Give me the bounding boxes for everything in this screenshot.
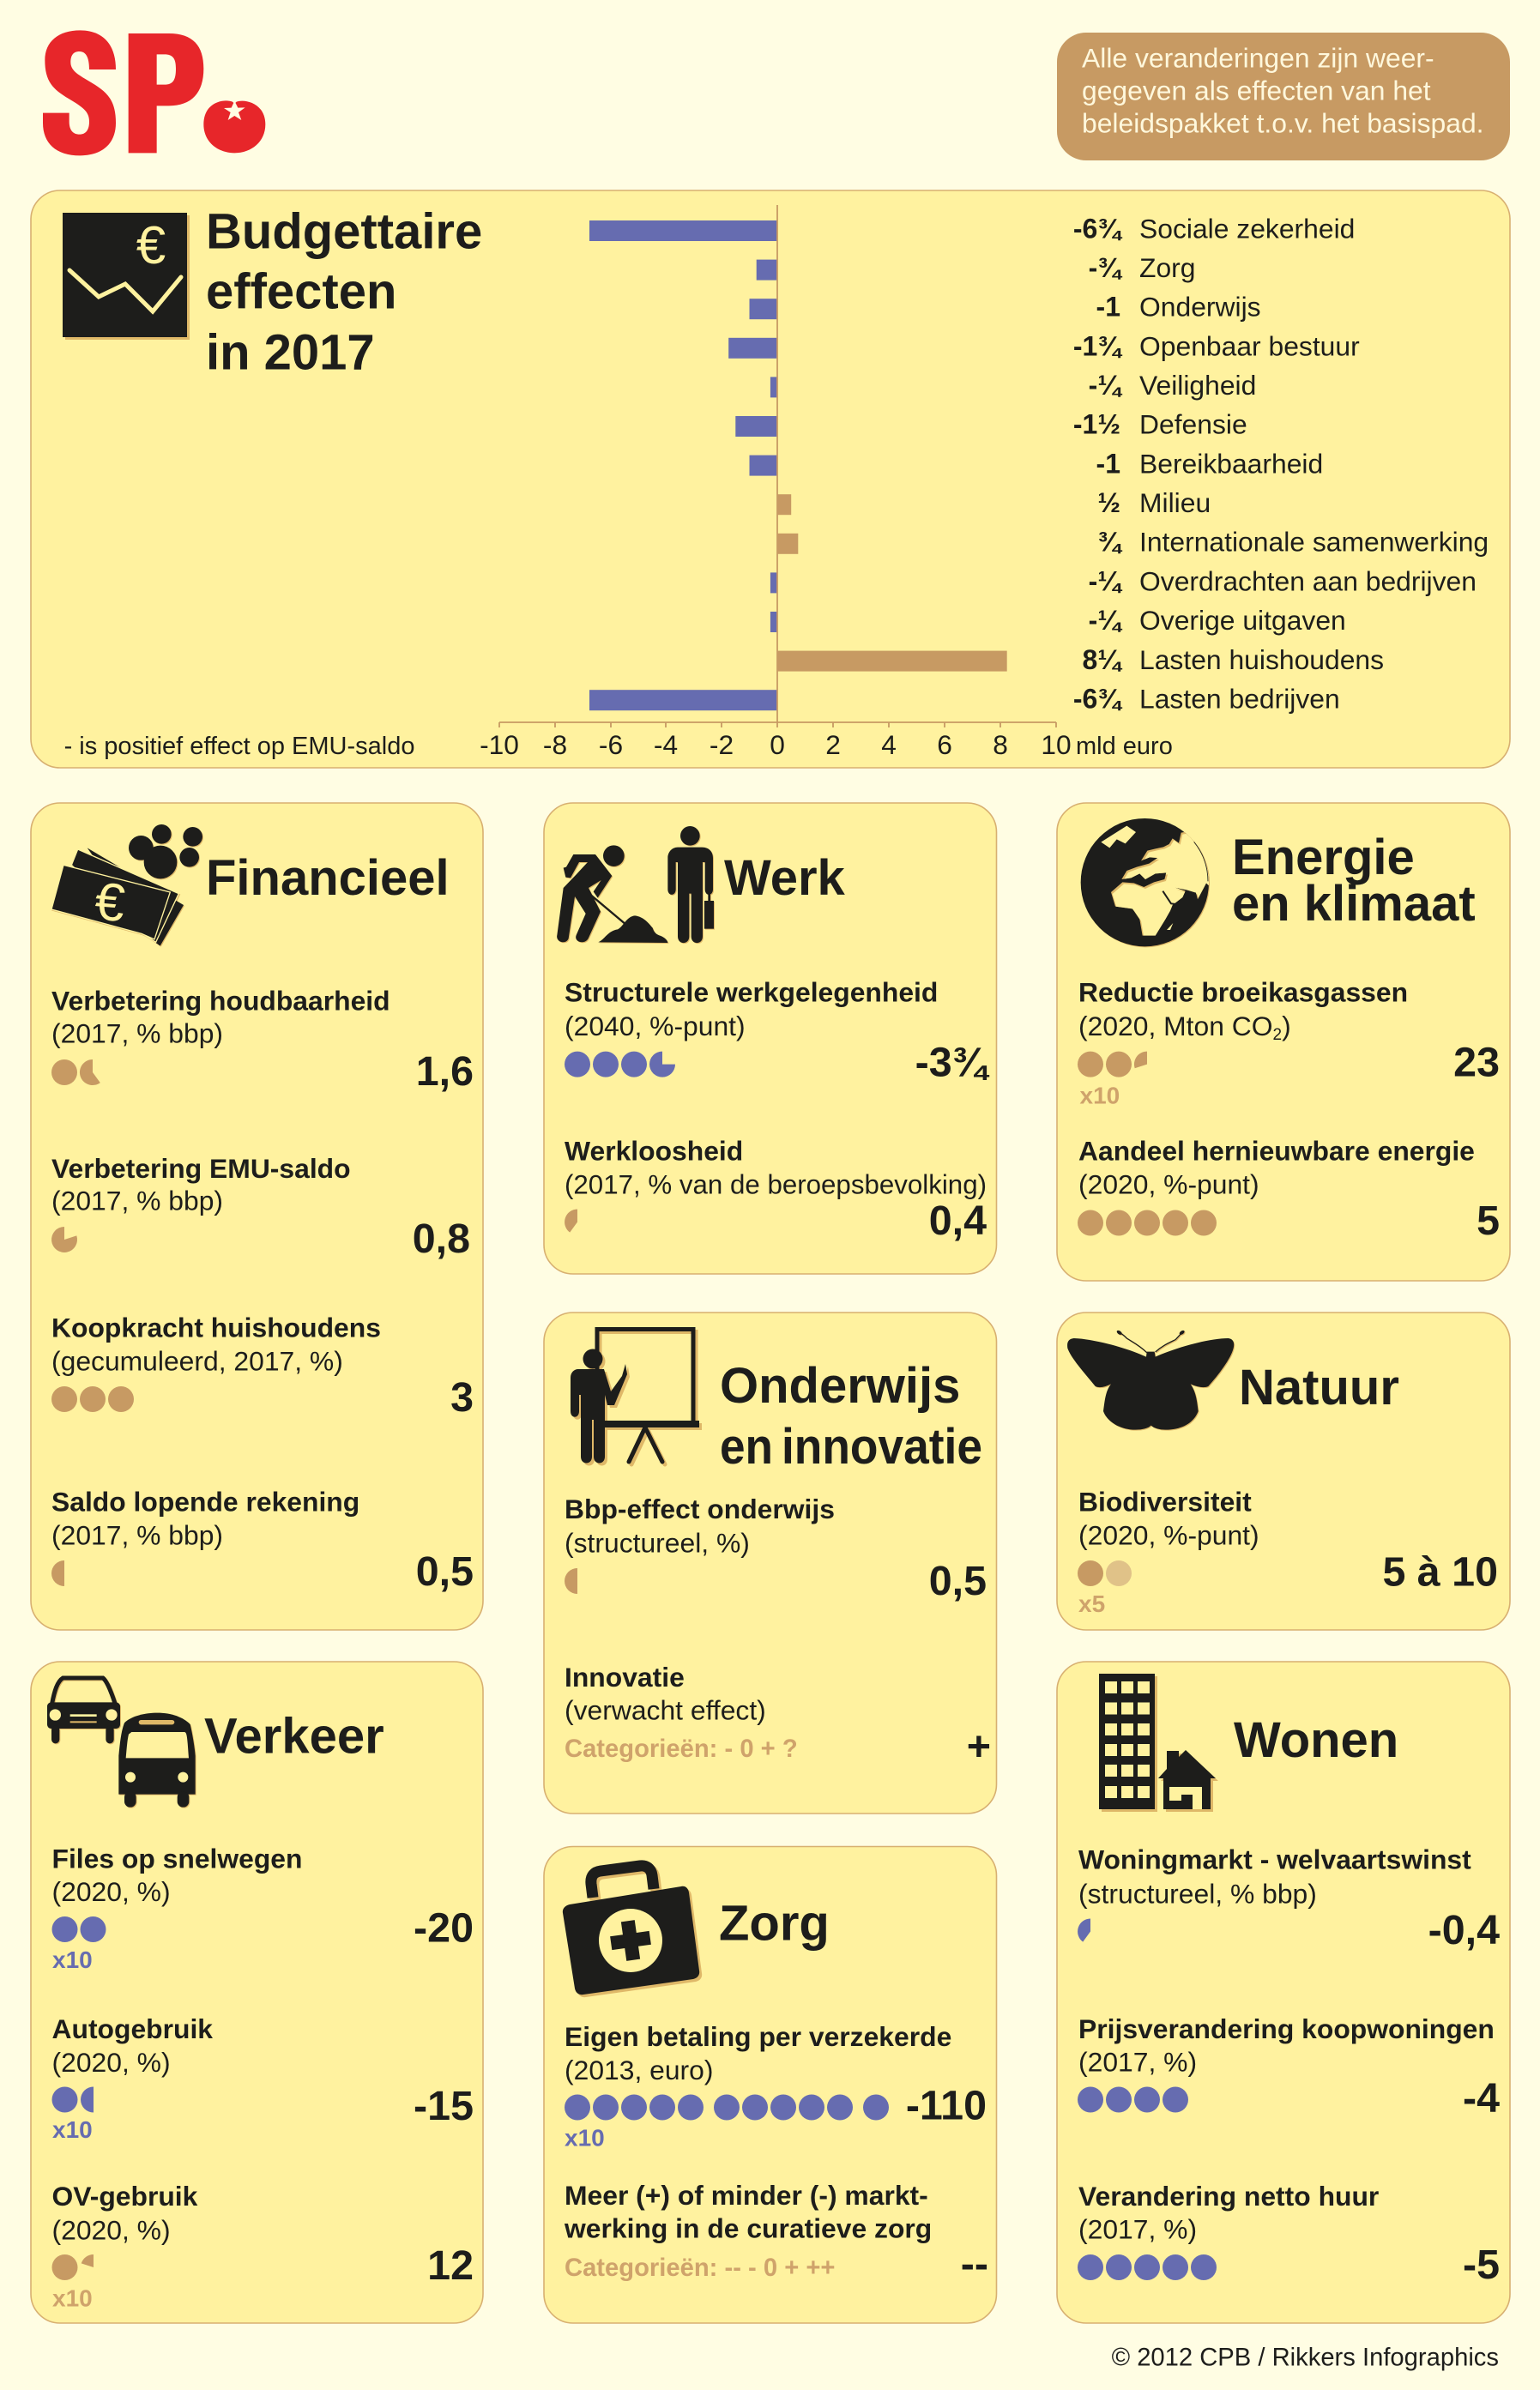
metric: koopkracht: Koopkracht huishoudens xyxy=(51,1313,381,1343)
heading: Werk xyxy=(724,850,846,906)
panel: zorg xyxy=(544,1846,997,2323)
metric: koopwoningen: Prijsverandering koopwoningen xyxy=(1078,2013,1495,2044)
logo: SP with tomato xyxy=(43,30,265,155)
axis labels: 0 xyxy=(770,729,785,760)
metric: netto huur: (2017, %) xyxy=(1078,2214,1197,2245)
panel: budgettaire effecten xyxy=(31,190,1510,768)
legend values and names: -¼ xyxy=(1089,565,1122,596)
axis labels: mld euro xyxy=(1076,733,1173,760)
metric: files: x10 xyxy=(52,1946,93,1973)
metric: koopwoningen: -4 xyxy=(1463,2075,1500,2121)
legend values and names: Bereikbaarheid xyxy=(1139,448,1323,479)
metric: eigen betaling: (2013, euro) xyxy=(565,2055,713,2085)
metric: biodiversiteit xyxy=(1078,1486,1498,1617)
metric: hernieuwbare energie: 5 xyxy=(1477,1198,1500,1244)
metric: broeikasgassen xyxy=(1078,976,1500,1109)
metric: netto huur: Verandering netto huur xyxy=(1078,2181,1379,2212)
metric: autogebruik: -15 xyxy=(414,2083,474,2129)
axis labels: 8 xyxy=(993,729,1008,760)
metric: marktwerking xyxy=(564,2180,988,2287)
icon: money: € xyxy=(93,872,127,933)
metric: broeikasgassen: 23 xyxy=(1453,1040,1500,1086)
metric: broeikasgassen: (2020, Mton CO xyxy=(1078,1011,1273,1041)
metric: woningmarkt: (structureel, % bbp) xyxy=(1078,1879,1317,1910)
metric: biodiversiteit: 5 à 10 xyxy=(1382,1549,1498,1596)
metric: bbp-effect: 0,5 xyxy=(929,1558,987,1604)
metric: bbp-effect: (structureel, %) xyxy=(565,1527,750,1558)
panel: energie en klimaat xyxy=(1057,803,1510,1281)
axis labels: 10 xyxy=(1041,729,1072,760)
metric: OV-gebruik xyxy=(51,2181,474,2312)
metric: eigen betaling: x10 xyxy=(565,2125,605,2152)
metric: biodiversiteit: Biodiversiteit xyxy=(1078,1486,1252,1517)
legend values and names: 8¼ xyxy=(1083,644,1122,675)
axis labels: 4 xyxy=(881,729,897,760)
metric: marktwerking: -- xyxy=(961,2241,988,2287)
legend values and names: -1¾ xyxy=(1073,330,1122,361)
metric: hernieuwbare energie: Aandeel hernieuwbare energie xyxy=(1078,1136,1475,1167)
axis labels: 2 xyxy=(825,729,841,760)
callout: note on baseline: beleidspakket t.o.v. het basispad. xyxy=(1082,107,1484,138)
heading: Verkeer xyxy=(204,1709,384,1764)
heading: Financieel xyxy=(206,850,450,906)
heading: budgettaire effecten in 2017: effecten xyxy=(206,264,396,319)
metric: files xyxy=(51,1843,474,1973)
metric: lopende rekening xyxy=(51,1486,474,1595)
metric: autogebruik xyxy=(51,2013,474,2143)
legend values and names: Overdrachten aan bedrijven xyxy=(1139,565,1477,596)
metric: werkgelegenheid: Structurele werkgelegenheid xyxy=(565,976,938,1007)
legend values and names: ½ xyxy=(1097,487,1120,518)
metric: bbp-effect: Bbp-effect onderwijs xyxy=(565,1494,835,1524)
heading: budgettaire effecten in 2017: in 2017 xyxy=(206,324,375,381)
metric: koopkracht xyxy=(51,1313,474,1421)
metric: innovatie xyxy=(565,1662,991,1770)
metric: OV-gebruik: (2020, %) xyxy=(51,2215,171,2246)
callout: note on baseline: gegeven als effecten van het xyxy=(1082,75,1431,106)
legend values and names: Zorg xyxy=(1139,252,1195,283)
icon: butterfly xyxy=(1067,1330,1234,1430)
metric: broeikasgassen: 2 xyxy=(1273,1026,1282,1044)
legend values and names: -6¾ xyxy=(1073,213,1122,244)
legend values and names: Defensie xyxy=(1139,409,1247,440)
heading: Onderwijs xyxy=(720,1358,960,1414)
metric: woningmarkt: -0,4 xyxy=(1428,1907,1500,1953)
credit: © 2012 CPB / Rikkers Infographics xyxy=(1112,2345,1499,2372)
metric: werkloosheid: 0,4 xyxy=(929,1198,987,1244)
metric: koopkracht: 3 xyxy=(450,1374,474,1421)
icon: globe xyxy=(1081,818,1223,946)
metric: eigen betaling xyxy=(565,2021,987,2152)
heading: Energie xyxy=(1232,830,1415,885)
icon: money xyxy=(51,824,202,946)
bar chart xyxy=(499,205,1056,727)
axis labels: -10 xyxy=(480,729,519,760)
metric: houdbaarheid: Verbetering houdbaarheid xyxy=(51,985,390,1016)
metric: innovatie: Innovatie xyxy=(565,1662,685,1693)
metric: OV-gebruik: x10 xyxy=(52,2285,93,2312)
metric: broeikasgassen: x10 xyxy=(1079,1083,1120,1109)
axis labels: -4 xyxy=(654,729,678,760)
heading xyxy=(1232,830,1476,932)
heading xyxy=(720,1358,982,1475)
legend values and names: -6¾ xyxy=(1073,683,1122,714)
heading: Zorg xyxy=(719,1896,830,1952)
callout: note on baseline: Alle veranderingen zijn weer- xyxy=(1082,43,1434,74)
metric: autogebruik: Autogebruik xyxy=(51,2013,213,2044)
panel: financieel xyxy=(31,803,483,1630)
metric: broeikasgassen: ) xyxy=(1282,1011,1291,1041)
panel: verkeer xyxy=(31,1662,483,2323)
metric: hernieuwbare energie xyxy=(1078,1136,1500,1244)
metric: koopkracht: (gecumuleerd, 2017, %) xyxy=(51,1345,343,1376)
metric: eigen betaling: Eigen betaling per verzekerde xyxy=(565,2021,951,2052)
metric: lopende rekening: (2017, % bbp) xyxy=(51,1520,223,1551)
icon: flat and house xyxy=(1099,1674,1216,1809)
metric: OV-gebruik: 12 xyxy=(427,2242,474,2289)
metric: werkloosheid: (2017, % van de beroepsbevolking) xyxy=(565,1168,987,1199)
legend values and names: -1 xyxy=(1096,448,1120,479)
legend values and names: Milieu xyxy=(1139,487,1211,518)
metric: EMU-saldo: Verbetering EMU-saldo xyxy=(51,1153,351,1184)
metric: EMU-saldo: 0,8 xyxy=(413,1216,470,1262)
panel: natuur xyxy=(1057,1313,1510,1630)
metric: files: -20 xyxy=(414,1904,474,1951)
legend values and names: -¼ xyxy=(1089,605,1122,636)
heading: innovatie xyxy=(782,1419,982,1475)
metric: werkloosheid: Werkloosheid xyxy=(565,1136,743,1167)
metric: houdbaarheid: (2017, % bbp) xyxy=(51,1017,223,1048)
panel: onderwijs en innovatie xyxy=(544,1313,997,1814)
callout: note on baseline xyxy=(1057,33,1510,160)
metric: innovatie: Categorieën: - 0 + ? xyxy=(565,1735,798,1763)
metric: lopende rekening: Saldo lopende rekening xyxy=(51,1486,359,1517)
metric: biodiversiteit: (2020, %-punt) xyxy=(1078,1520,1259,1551)
icon: euro chart: € xyxy=(136,216,166,275)
axis labels: -8 xyxy=(543,729,567,760)
icon: euro chart xyxy=(63,213,187,337)
metric: woningmarkt: Woningmarkt - welvaartswinst xyxy=(1078,1844,1471,1875)
legend values and names: ¾ xyxy=(1097,527,1122,558)
note: sign convention: - is positief effect op EMU-saldo xyxy=(64,733,414,760)
metric: eigen betaling: -110 xyxy=(906,2083,987,2129)
metric: woningmarkt xyxy=(1078,1844,1500,1953)
axis labels: 6 xyxy=(937,729,952,760)
legend values and names: Lasten huishoudens xyxy=(1139,644,1384,675)
legend values and names: Onderwijs xyxy=(1139,292,1261,323)
metric: files: Files op snelwegen xyxy=(51,1843,302,1874)
legend values and names: -¼ xyxy=(1089,370,1122,401)
metric: netto huur xyxy=(1078,2181,1500,2288)
metric: files: (2020, %) xyxy=(51,1876,171,1907)
legend values and names: Openbaar bestuur xyxy=(1139,330,1360,361)
legend values and names: -1½ xyxy=(1073,409,1120,440)
heading: Wonen xyxy=(1234,1712,1398,1768)
metric: houdbaarheid xyxy=(51,985,474,1095)
metric: werkgelegenheid: (2040, %-punt) xyxy=(565,1011,746,1041)
legend values and names: Internationale samenwerking xyxy=(1139,527,1489,558)
legend values and names xyxy=(1073,213,1489,714)
metric: broeikasgassen: Reductie broeikasgassen xyxy=(1078,976,1408,1007)
heading: Natuur xyxy=(1239,1360,1399,1415)
metric: werkloosheid xyxy=(565,1136,987,1244)
metric: bbp-effect xyxy=(565,1494,987,1604)
metric: EMU-saldo xyxy=(51,1153,470,1262)
heading: en xyxy=(720,1419,773,1475)
metric: lopende rekening: 0,5 xyxy=(416,1548,474,1595)
metric: autogebruik: (2020, %) xyxy=(51,2047,171,2078)
metric: marktwerking: Meer (+) of minder (-) markt- xyxy=(565,2180,928,2211)
legend values and names: Veiligheid xyxy=(1139,370,1256,401)
metric: hernieuwbare energie: (2020, %-punt) xyxy=(1078,1168,1259,1199)
metric: netto huur: -5 xyxy=(1463,2242,1500,2288)
metric: koopwoningen: (2017, %) xyxy=(1078,2047,1197,2078)
metric: biodiversiteit: x5 xyxy=(1078,1590,1105,1617)
panel: wonen xyxy=(1057,1662,1510,2323)
heading: budgettaire effecten in 2017: Budgettaire xyxy=(206,204,482,259)
metric: EMU-saldo: (2017, % bbp) xyxy=(51,1186,223,1216)
heading: en klimaat xyxy=(1232,876,1476,932)
icon: car and bus xyxy=(47,1678,196,1808)
panel: werk xyxy=(544,803,997,1274)
icon: first aid case xyxy=(563,1866,699,1995)
axis labels: -2 xyxy=(710,729,734,760)
axis labels: -6 xyxy=(599,729,623,760)
legend values and names: Lasten bedrijven xyxy=(1139,683,1340,714)
legend values and names: Sociale zekerheid xyxy=(1139,213,1355,244)
legend values and names: -1 xyxy=(1096,292,1120,323)
metric: marktwerking: Categorieën: -- - 0 + ++ xyxy=(565,2254,835,2282)
metric: werkgelegenheid xyxy=(565,976,990,1086)
metric: houdbaarheid: 1,6 xyxy=(416,1048,474,1095)
metric: koopwoningen xyxy=(1078,2013,1500,2121)
metric: innovatie: + xyxy=(967,1723,991,1770)
icon: teacher at board xyxy=(571,1330,699,1464)
metric: werkgelegenheid: -3¾ xyxy=(915,1040,990,1086)
axis labels xyxy=(480,729,1173,760)
heading: budgettaire effecten in 2017 xyxy=(206,204,482,381)
legend values and names: -¾ xyxy=(1089,252,1122,283)
metric: autogebruik: x10 xyxy=(52,2116,93,2143)
legend values and names: Overige uitgaven xyxy=(1139,605,1346,636)
metric: marktwerking: werking in de curatieve zorg xyxy=(564,2213,932,2244)
metric: OV-gebruik: OV-gebruik xyxy=(51,2181,198,2212)
icon: workers xyxy=(557,826,714,943)
metric: innovatie: (verwacht effect) xyxy=(565,1695,766,1726)
